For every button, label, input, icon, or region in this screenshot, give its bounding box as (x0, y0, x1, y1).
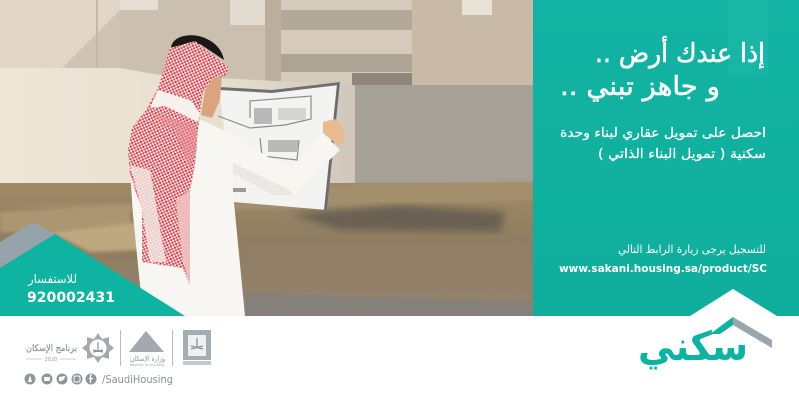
panel: teal message (533, 0, 799, 316)
logo wordmark: سكني (638, 324, 748, 370)
building background (0, 0, 533, 87)
white roof tab (690, 289, 777, 316)
heading line two: و جاهز تبني .. (560, 72, 720, 102)
heading line one: إذا عندك أرض .. (595, 35, 765, 69)
photo: man reviewing plan on empty land (0, 0, 533, 316)
housing program wordmark (26, 344, 77, 363)
social media icons (24, 374, 96, 384)
thobe (130, 118, 340, 316)
registration prompt: للتسجيل يرجى زيارة الرابط التالي (618, 243, 766, 256)
hotline triangle (0, 222, 185, 316)
description line one: احصل على تمويل عقاري لبناء وحدة (560, 126, 766, 141)
agal (171, 35, 224, 60)
social handle: /SaudiHousing (102, 374, 173, 386)
sakani logo (638, 289, 777, 370)
hand (323, 119, 345, 146)
footer logos (24, 330, 211, 386)
blueprint (218, 82, 340, 210)
vision star emblem (82, 333, 114, 363)
logo roof teal arm (710, 317, 733, 334)
neck and face (201, 72, 222, 118)
ministry of housing logo (129, 331, 165, 367)
ministry of housing logo: وزارة الإسكان (130, 355, 165, 363)
description line two: سكنية ( تمويل البناء الذاتي ) (598, 147, 766, 162)
white footer (0, 316, 799, 400)
teal triangle (0, 234, 185, 316)
ground (0, 182, 533, 316)
grey wall (340, 85, 533, 187)
cream wall (0, 68, 355, 205)
ghutra headscarf (128, 41, 228, 285)
ministry of housing logo: MINISTRY OF HOUSING (130, 363, 165, 367)
housing program wordmark: برنامج الإسكان (26, 344, 77, 354)
man in white thobe (128, 35, 345, 316)
housing program wordmark: 2020 (45, 357, 57, 363)
hotline number: 920002431 (27, 290, 115, 306)
enquiry label: للاستفسار (27, 272, 77, 287)
logo roof grey arm (733, 317, 772, 348)
website url: www.sakani.housing.sa/product/SC (559, 262, 767, 275)
grey roof band (0, 222, 55, 268)
real estate fund emblem (183, 330, 211, 365)
